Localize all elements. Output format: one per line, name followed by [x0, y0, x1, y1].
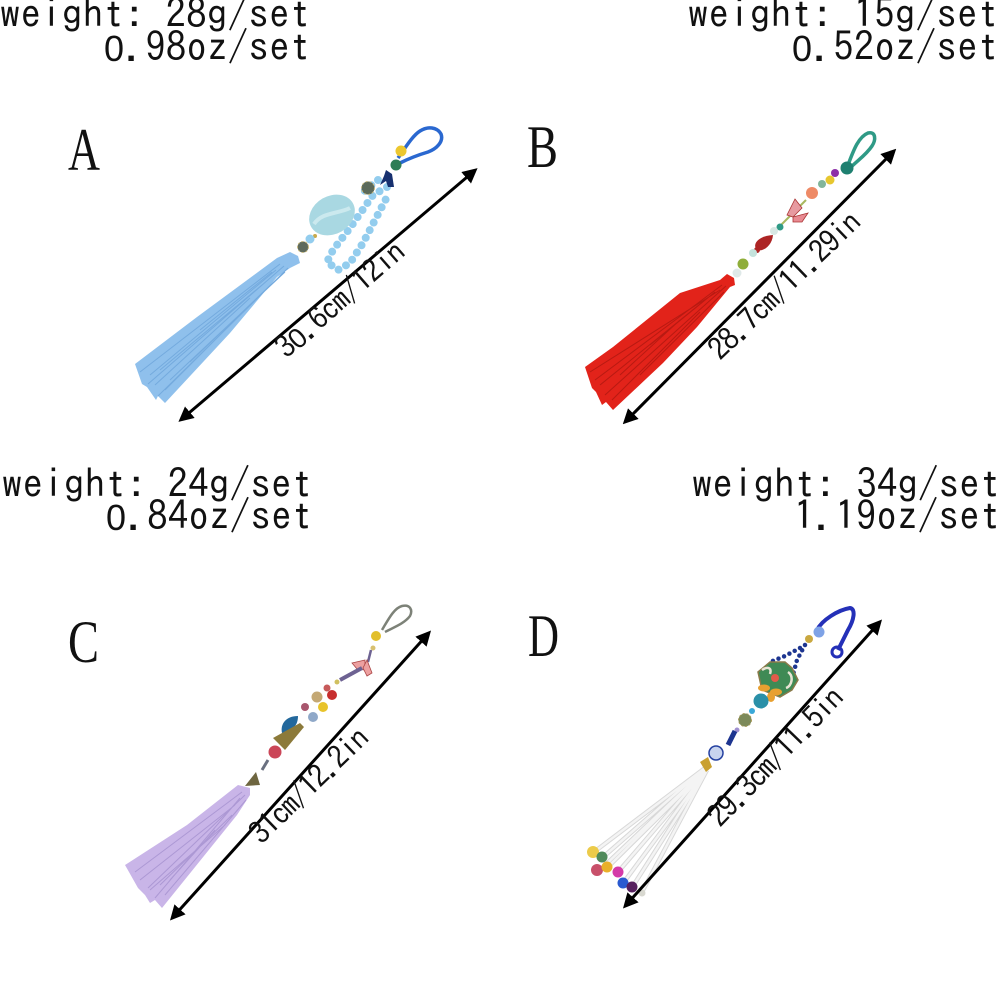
- panel: product C: [2, 463, 427, 916]
- dimension arrow C: [174, 635, 427, 916]
- letter A: A: [68, 117, 100, 183]
- panel: product B: [527, 0, 998, 420]
- weight text A: 0.98oz/set: [104, 26, 310, 69]
- dimension text D: 29.3cm/11.5in: [702, 681, 849, 832]
- weight text D: [692, 463, 1000, 535]
- dimension text C: 31cm/12.2in: [243, 721, 374, 849]
- dimension arrow A: [183, 172, 473, 418]
- tassel pendant B: [585, 133, 875, 410]
- weight text A: [0, 0, 310, 69]
- letter C: C: [68, 609, 99, 675]
- weight text D: weight: 34g/set: [692, 463, 1000, 503]
- dimension arrow B: [627, 153, 892, 420]
- weight text C: weight: 24g/set: [2, 463, 312, 503]
- dimension arrow D: [627, 624, 878, 904]
- panel: product D: [528, 463, 1000, 904]
- dimension text A: 30.6cm/12in: [269, 235, 412, 365]
- letter D: D: [528, 603, 559, 669]
- weight text B: [688, 0, 998, 69]
- tassel pendant D: [587, 608, 854, 896]
- weight text C: 0.84oz/set: [106, 495, 312, 538]
- tassel pendant A: [135, 128, 442, 403]
- letter B: B: [527, 114, 558, 180]
- dimension text B: 28.7cm/11.29in: [702, 205, 866, 365]
- panel: product A: [0, 0, 473, 418]
- weight text B: 0.52oz/set: [792, 26, 998, 69]
- tassel pendant C: [125, 606, 411, 908]
- weight text C: [2, 463, 312, 538]
- weight text D: 1.19oz/set: [794, 495, 1000, 535]
